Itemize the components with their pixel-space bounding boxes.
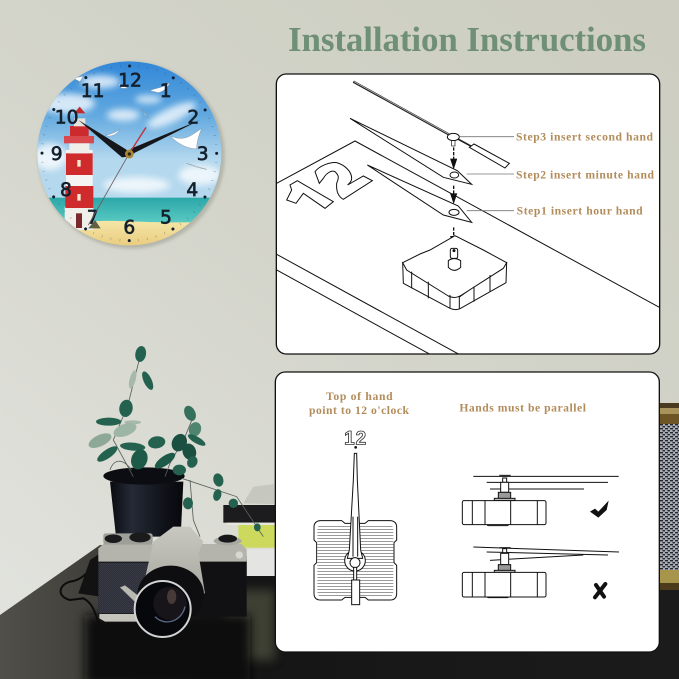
side lever bbox=[120, 585, 139, 602]
clock product bbox=[33, 60, 227, 250]
twelve marker dot bbox=[354, 446, 357, 449]
top plate bbox=[98, 544, 247, 562]
clock numerals: 10 bbox=[55, 107, 79, 128]
clock numerals: 8 bbox=[60, 180, 72, 201]
hour dots bbox=[42, 66, 217, 241]
bottom plate bbox=[99, 614, 147, 622]
icon: cross mark bbox=[595, 584, 605, 597]
clock face shadow bbox=[38, 62, 225, 249]
step labels: Step2 insert minute hand bbox=[516, 169, 655, 182]
books bbox=[223, 484, 275, 576]
leader lines bbox=[459, 137, 514, 211]
clouds bbox=[33, 75, 222, 193]
step labels: Step1 insert hour hand bbox=[517, 205, 643, 218]
insertion arrows bbox=[451, 147, 456, 245]
leatherette bbox=[98, 563, 148, 613]
stacked hands bbox=[345, 453, 365, 605]
desk surface bbox=[0, 545, 679, 679]
step labels bbox=[516, 131, 655, 218]
clock movement bbox=[403, 236, 507, 310]
dials bbox=[103, 532, 243, 559]
panel: assembly steps bbox=[276, 74, 660, 354]
left caption bbox=[309, 390, 410, 417]
clock numerals: 4 bbox=[186, 180, 198, 201]
lighthouse bbox=[64, 107, 101, 230]
minute hand bbox=[350, 118, 472, 184]
hour hand bbox=[367, 165, 472, 222]
panel background bbox=[276, 74, 660, 354]
clock dial outline bbox=[277, 141, 659, 354]
sea bbox=[48, 198, 210, 228]
clock hands bbox=[78, 120, 200, 225]
right caption: Hands must be parallel bbox=[459, 402, 587, 415]
pentaprism bbox=[145, 527, 205, 593]
left caption: point to 12 o'clock bbox=[309, 404, 410, 417]
clock numerals: 3 bbox=[197, 144, 209, 165]
clock numerals: 2 bbox=[187, 107, 199, 128]
clock numerals: 6 bbox=[123, 217, 135, 238]
panel: alignment guidance bbox=[275, 372, 659, 652]
still life photo: plant, camera and books bbox=[61, 345, 275, 637]
camera body bbox=[98, 560, 247, 617]
beach bbox=[71, 220, 190, 246]
seagulls bbox=[73, 76, 207, 169]
clock numerals: 1 bbox=[160, 81, 172, 102]
lens front bbox=[135, 581, 191, 637]
dial numeral 12 bbox=[287, 162, 372, 208]
clock numerals: 7 bbox=[87, 207, 99, 228]
minute ticks bbox=[42, 66, 217, 241]
clock numerals: 5 bbox=[160, 207, 172, 228]
clock numerals: 9 bbox=[51, 144, 63, 165]
camera bbox=[98, 527, 247, 637]
clock numerals bbox=[51, 70, 209, 238]
front view movement bbox=[314, 453, 397, 605]
right edge frame object bbox=[660, 403, 679, 679]
plant leaves bbox=[86, 345, 261, 531]
clock artwork bbox=[33, 60, 227, 250]
side view: non-parallel hands bbox=[462, 547, 619, 598]
icon: check mark bbox=[590, 501, 609, 518]
lens glass bbox=[153, 587, 187, 622]
step labels: Step3 insert second hand bbox=[516, 131, 654, 144]
lens barrel bbox=[137, 566, 204, 624]
camera strap bbox=[61, 557, 100, 627]
strap lug bbox=[78, 553, 100, 597]
left caption: Top of hand bbox=[326, 390, 393, 403]
side view: parallel hands bbox=[462, 475, 619, 526]
clock numerals: 12 bbox=[118, 70, 142, 91]
title: Installation Instructions bbox=[288, 20, 646, 59]
plant stems bbox=[110, 357, 263, 537]
plant pot bbox=[103, 467, 185, 537]
clock numerals: 11 bbox=[81, 81, 105, 102]
second hand bbox=[353, 82, 509, 168]
panel background bbox=[275, 372, 659, 652]
outlined 12: 12 bbox=[344, 428, 367, 449]
